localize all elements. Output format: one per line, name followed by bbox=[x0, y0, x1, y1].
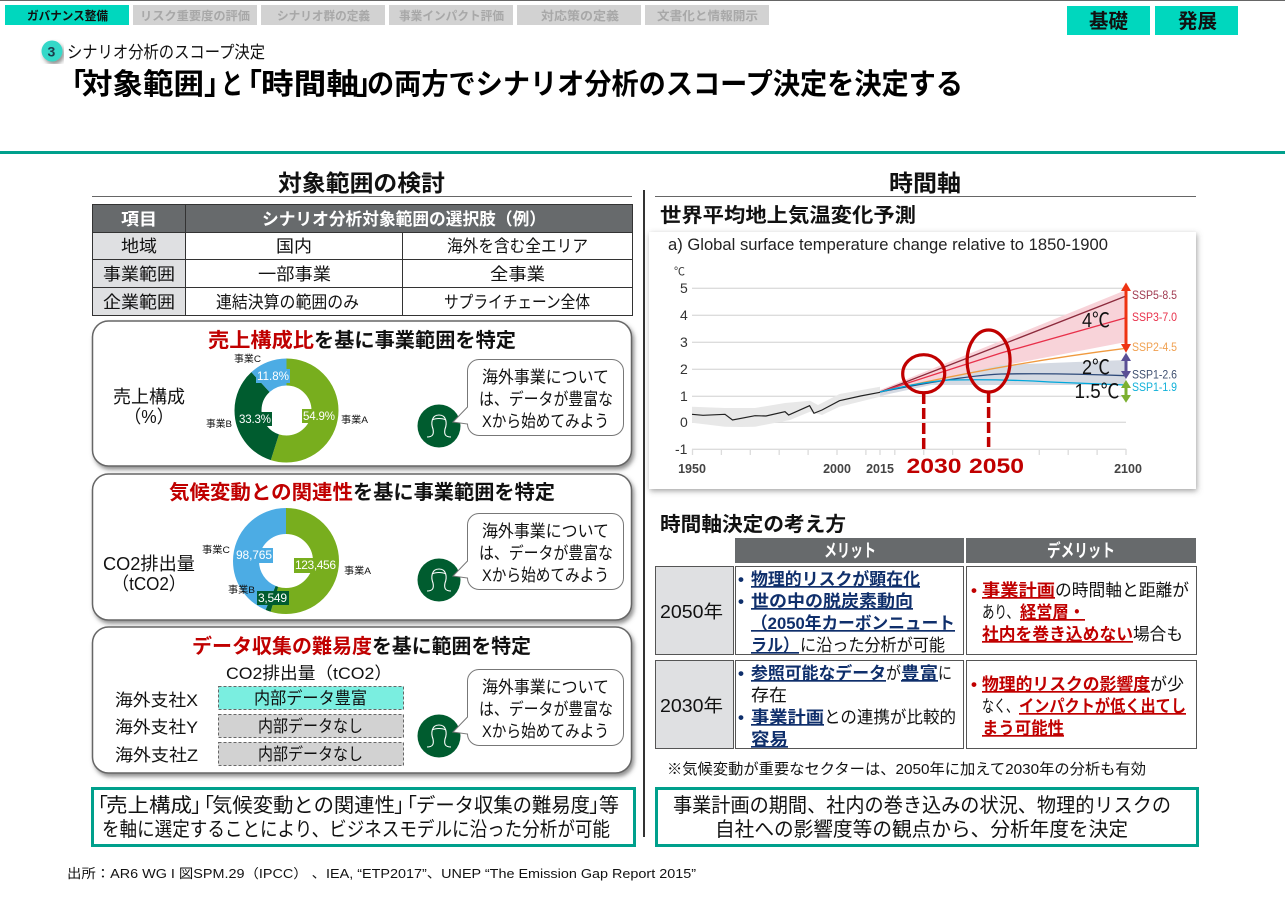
callout: left conclusion: 」 bbox=[394, 795, 414, 817]
x axis labels bbox=[678, 462, 1142, 476]
scenario lines bbox=[880, 296, 1126, 392]
marker: 2030: 2030 bbox=[906, 455, 962, 478]
temperature labels bbox=[1074, 310, 1120, 403]
button: advanced bbox=[1155, 6, 1238, 35]
arrow: 4 degree range bbox=[1121, 282, 1131, 353]
panel: data difficulty bbox=[92, 627, 632, 773]
subsidiaries data grid: 海外支社Y bbox=[115, 718, 198, 737]
row: 2030: 豊富 bbox=[901, 663, 938, 683]
scenario labels: SSP1-2.6 bbox=[1132, 368, 1177, 382]
panel heading: 気候変動との関連性 bbox=[169, 480, 353, 504]
subsidiaries data grid: 内部データなし bbox=[258, 744, 363, 764]
callout: right conclusion: 自社への影響度等の観点から、分析年度を決定 bbox=[715, 818, 1128, 841]
table rows: サプライチェーン全体 bbox=[444, 293, 590, 312]
button: advanced: 発展 bbox=[1178, 10, 1217, 33]
tab: risk evaluation: リスク重要度の評価 bbox=[140, 8, 250, 23]
axis label: 売上構成 bbox=[113, 387, 185, 407]
subsidiaries data grid bbox=[115, 686, 404, 766]
callout: left conclusion: 」 bbox=[589, 795, 609, 817]
callout: left conclusion: データ収集の難易度 bbox=[416, 794, 590, 817]
column headers: デメリット bbox=[1047, 540, 1115, 561]
row: 2050: の時間軸と距離が bbox=[1055, 581, 1189, 600]
step number badge: 3 bbox=[48, 44, 56, 60]
scenario labels: SSP5-8.5 bbox=[1132, 288, 1177, 302]
heading: time axis thinking: 時間軸決定の考え方 bbox=[660, 513, 846, 536]
title: と bbox=[221, 69, 243, 101]
panel heading: データ収集の難易度 bbox=[192, 634, 372, 658]
temperature labels: 1.5℃ bbox=[1074, 381, 1120, 403]
y axis labels: 0 bbox=[680, 414, 688, 430]
subsidiaries data grid: 内部データ豊富 bbox=[254, 688, 367, 708]
donut chart: sales: 54.9% bbox=[303, 411, 335, 423]
y axis labels: ℃ bbox=[674, 266, 685, 278]
callout: left conclusion: 」 bbox=[191, 795, 211, 817]
tab: scenario definition bbox=[261, 5, 385, 25]
donut chart: CO2: 事業A bbox=[344, 565, 372, 577]
marker: 2030 bbox=[903, 355, 962, 478]
donut chart: CO2: 事業B bbox=[228, 584, 255, 596]
callout: left conclusion: 売上構成 bbox=[106, 794, 192, 817]
table: scope options bbox=[92, 204, 632, 316]
axis label bbox=[113, 387, 185, 427]
row: 2030: 容易 bbox=[751, 729, 788, 749]
tab: active governance: ガバナンス整備 bbox=[27, 8, 108, 23]
row: 2030: • bbox=[971, 675, 977, 694]
y axis labels bbox=[674, 266, 688, 457]
historical uncertainty band bbox=[692, 387, 880, 427]
title: 対象範囲 bbox=[82, 68, 204, 101]
x axis labels: 2100 bbox=[1114, 462, 1142, 476]
axis label: （tCO2） bbox=[112, 574, 186, 594]
level buttons bbox=[1067, 6, 1238, 35]
donut chart: CO2: 98,765 bbox=[236, 548, 272, 562]
row: 2050: 世の中の脱炭素動向 bbox=[751, 592, 913, 611]
speech bubble: 海外事業について bbox=[482, 368, 609, 387]
callout: left conclusion: 「 bbox=[397, 794, 417, 817]
row: 2030: • bbox=[738, 708, 744, 727]
table rows bbox=[103, 237, 590, 312]
row: 2030: インパクトが低く出てし bbox=[1019, 696, 1186, 716]
icon: person bbox=[418, 404, 460, 448]
row: 2050: 2050年 bbox=[660, 602, 723, 622]
x axis labels: 1950 bbox=[678, 462, 706, 476]
speech bubble: Xから始めてみよう bbox=[482, 566, 609, 585]
gridlines bbox=[692, 288, 1126, 455]
title bbox=[57, 68, 963, 101]
speech bubble bbox=[453, 514, 624, 590]
table rows: 一部事業 bbox=[258, 265, 331, 284]
callout: left conclusion: 気候変動との関連性 bbox=[212, 794, 395, 817]
title: の両方でシナリオ分析のスコープ決定を決定する bbox=[367, 68, 963, 101]
scenario labels: SSP1-1.9 bbox=[1132, 380, 1177, 394]
scenario labels bbox=[1132, 288, 1177, 394]
callout: left conclusion: 「 bbox=[194, 794, 214, 817]
row: 2030 bbox=[656, 660, 1196, 749]
arrow: 1.5 degree range bbox=[1121, 380, 1131, 403]
axis label bbox=[103, 554, 195, 594]
axis label: CO2排出量 bbox=[103, 554, 195, 574]
row: 2030: まう可能性 bbox=[982, 718, 1064, 738]
table rows: 地域 bbox=[121, 237, 157, 256]
footnote: ※気候変動が重要なセクターは、2050年に加えて2030年の分析も有効 bbox=[667, 761, 1146, 778]
row: 2050: 経営層・ bbox=[1020, 603, 1085, 622]
donut chart: sales: 33.3% bbox=[239, 414, 271, 426]
table rows: 国内 bbox=[276, 237, 312, 256]
row: 2050: • bbox=[738, 592, 744, 611]
row: 2050: 物理的リスクが顕在化 bbox=[751, 569, 920, 589]
button: basic: 基礎 bbox=[1089, 10, 1128, 33]
column headers: メリット bbox=[824, 541, 876, 561]
row: 2030: 物理的リスクの影響度 bbox=[982, 674, 1150, 694]
table rows: 連結決算の範囲のみ bbox=[216, 293, 359, 312]
marker: 2050: 2050 bbox=[969, 455, 1024, 478]
table rows: 海外を含む全エリア bbox=[447, 237, 588, 256]
chart title: a) Global surface temperature change relative to 1850-1900 bbox=[668, 235, 1108, 254]
heading: time axis: 時間軸 bbox=[889, 170, 961, 196]
speech bubble: Xから始めてみよう bbox=[482, 722, 609, 741]
row: 2030: が bbox=[886, 664, 901, 683]
y axis labels: 5 bbox=[680, 280, 688, 296]
row: 2030: との連携が比較的 bbox=[824, 708, 956, 727]
chart: global surface temperature bbox=[649, 232, 1196, 489]
speech bubble: Xから始めてみよう bbox=[482, 412, 609, 431]
tab: scenario definition: シナリオ群の定義 bbox=[277, 8, 370, 23]
table rows: 事業範囲 bbox=[103, 265, 175, 284]
table: merits and demerits bbox=[656, 538, 1196, 749]
row: 2050: に沿った分析が可能 bbox=[800, 636, 945, 655]
y axis labels: 2 bbox=[680, 361, 688, 377]
row: 2030: なく、 bbox=[982, 697, 1018, 716]
speech bubble bbox=[453, 670, 624, 746]
donut chart: sales bbox=[206, 353, 369, 449]
subtitle: シナリオ分析のスコープ決定 bbox=[67, 43, 265, 62]
donut chart: sales: 事業C bbox=[234, 353, 261, 365]
heading: scope review: 対象範囲の検討 bbox=[278, 170, 445, 196]
title: 」 bbox=[204, 69, 233, 101]
tab: risk evaluation bbox=[133, 5, 257, 25]
row: 2050: • bbox=[971, 581, 977, 600]
x axis labels: 2000 bbox=[823, 462, 851, 476]
speech bubble: は、データが豊富な bbox=[479, 389, 613, 409]
icon: person bbox=[418, 558, 460, 602]
subsidiaries data grid: 海外支社Z bbox=[115, 746, 198, 765]
table header: 項目 bbox=[121, 210, 157, 229]
tab: documentation bbox=[645, 5, 769, 25]
table header: シナリオ分析対象範囲の選択肢（例） bbox=[262, 209, 546, 229]
scenario labels: SSP2-4.5 bbox=[1132, 340, 1177, 354]
panel: climate relevance bbox=[92, 474, 632, 620]
panel heading: を基に事業範囲を特定 bbox=[314, 329, 516, 352]
icon: person bbox=[418, 714, 460, 758]
row: 2050: 場合も bbox=[1133, 625, 1183, 644]
speech bubble: は、データが豊富な bbox=[479, 699, 613, 719]
y axis labels: 3 bbox=[680, 334, 688, 350]
column headers bbox=[735, 538, 1196, 563]
donut chart: sales: 事業A bbox=[341, 414, 369, 426]
row: 2030: 参照可能なデータ bbox=[751, 663, 886, 683]
donut chart: sales: 事業B bbox=[206, 418, 232, 430]
row: 2050: 社内を巻き込めない bbox=[982, 625, 1133, 644]
table rows: 企業範囲 bbox=[103, 293, 175, 312]
donut chart: CO2: 3,549 bbox=[258, 591, 287, 605]
callout: left conclusion: 「 bbox=[88, 794, 108, 817]
scenario labels: SSP3-7.0 bbox=[1132, 310, 1177, 324]
y axis labels: 1 bbox=[680, 388, 688, 404]
row: 2050: （2050年カーボンニュート bbox=[751, 613, 955, 633]
panel heading: を基に範囲を特定 bbox=[372, 635, 531, 658]
row: 2030: が少 bbox=[1150, 675, 1184, 694]
column label: CO2排出量（tCO2） bbox=[226, 664, 392, 683]
row: 2030: 2030年 bbox=[660, 696, 723, 716]
title: 時間軸 bbox=[261, 68, 359, 101]
source note: 出所：AR6 WG I 図SPM.29（IPCC） 、IEA, “ETP2017”、UNEP “The Emission Gap Report 2015” bbox=[67, 866, 696, 881]
row: 2050: • bbox=[738, 570, 744, 589]
marker: 2050 bbox=[967, 330, 1024, 478]
callout: left conclusion bbox=[88, 788, 634, 846]
step number badge bbox=[42, 40, 62, 62]
row: 2050: 事業計画 bbox=[982, 581, 1055, 600]
callout: left conclusion: 等 bbox=[599, 794, 619, 817]
panel heading bbox=[208, 328, 516, 352]
SSP uncertainty bands bbox=[880, 290, 1126, 396]
donut chart: sales: 11.8% bbox=[257, 371, 289, 383]
callout: left conclusion: を軸に選定することにより、ビジネスモデルに沿った分析が可能 bbox=[102, 818, 610, 841]
table rows: 全事業 bbox=[490, 265, 545, 284]
y axis labels: -1 bbox=[675, 441, 688, 457]
tab: business impact: 事業インパクト評価 bbox=[399, 8, 504, 23]
panel heading: 売上構成比 bbox=[208, 328, 314, 352]
temperature labels: 4℃ bbox=[1082, 310, 1110, 332]
tab: countermeasures bbox=[517, 5, 641, 25]
subsidiaries data grid: 海外支社X bbox=[115, 691, 198, 710]
panel: sales composition bbox=[92, 321, 632, 466]
button: basic bbox=[1067, 6, 1150, 35]
tab: documentation: 文書化と情報開示 bbox=[657, 8, 758, 23]
donut chart: CO2 bbox=[202, 521, 372, 605]
temperature labels: 2℃ bbox=[1082, 357, 1110, 379]
arrow: 2 degree range bbox=[1121, 353, 1131, 379]
tab: countermeasures: 対応策の定義 bbox=[541, 8, 619, 23]
panel heading bbox=[169, 480, 555, 504]
title: 「 bbox=[233, 68, 262, 101]
panel heading: を基に事業範囲を特定 bbox=[353, 481, 555, 504]
panel heading bbox=[192, 634, 531, 658]
speech bubble: 海外事業について bbox=[482, 678, 609, 697]
row: 2030: に bbox=[938, 664, 952, 683]
title: 」 bbox=[356, 69, 385, 101]
tab: active governance bbox=[5, 5, 129, 25]
row: 2050: あり、 bbox=[982, 603, 1019, 622]
title: 「 bbox=[57, 68, 86, 101]
row: 2030: 存在 bbox=[751, 686, 787, 705]
table header bbox=[121, 209, 546, 229]
tab: business impact bbox=[389, 5, 513, 25]
axis label: （%） bbox=[124, 407, 174, 427]
row: 2030: 事業計画 bbox=[751, 708, 824, 727]
row: 2050: ラル） bbox=[751, 636, 799, 655]
callout: right conclusion bbox=[656, 788, 1198, 846]
subsidiaries data grid: 内部データなし bbox=[258, 716, 363, 736]
y axis labels: 4 bbox=[680, 307, 688, 323]
donut chart: CO2: 事業C bbox=[202, 544, 230, 556]
speech bubble: 海外事業について bbox=[482, 522, 609, 541]
x axis labels: 2015 bbox=[866, 462, 894, 476]
row: 2030: • bbox=[738, 664, 744, 683]
speech bubble bbox=[453, 360, 624, 436]
donut chart: CO2: 123,456 bbox=[295, 558, 336, 572]
callout: right conclusion: 事業計画の期間、社内の巻き込みの状況、物理的リスクの bbox=[673, 794, 1171, 817]
speech bubble: は、データが豊富な bbox=[479, 543, 613, 563]
heading: global temperature projection: 世界平均地上気温変化予測 bbox=[660, 204, 916, 227]
historical line bbox=[692, 392, 880, 420]
navigation tabs bbox=[5, 5, 769, 25]
row: 2050 bbox=[656, 566, 1196, 655]
